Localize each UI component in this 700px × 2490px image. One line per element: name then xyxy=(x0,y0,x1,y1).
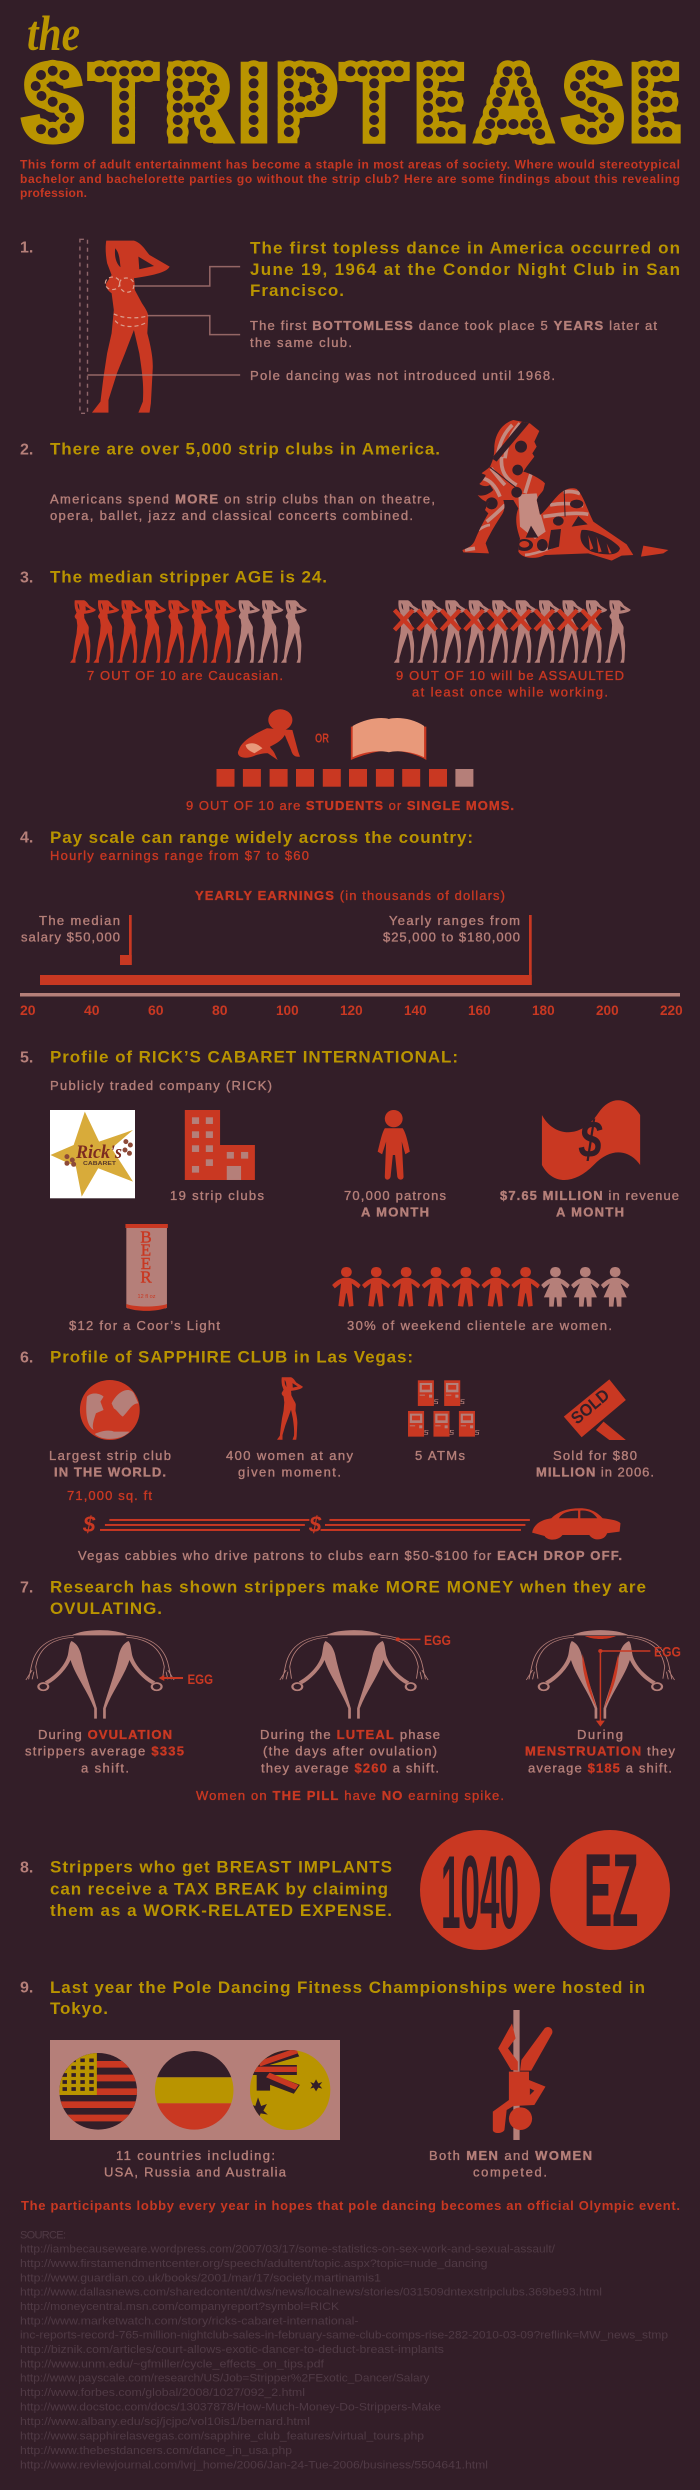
title marquee letters: A xyxy=(475,42,553,164)
body text: opera, ballet, jazz and classical concerts combined. xyxy=(50,508,413,523)
caption: menstruation xyxy=(525,1727,676,1776)
section 1: first dances xyxy=(20,238,680,413)
axis labels: 100 xyxy=(276,1002,299,1018)
range annotation and bar: $25,000 to $180,000 xyxy=(383,930,520,945)
heading: Profile of SAPPHIRE CLUB in Las Vegas: xyxy=(50,1348,413,1367)
label: egg: EGG xyxy=(654,1644,681,1660)
dollar signs xyxy=(82,1512,322,1537)
icon: atms xyxy=(408,1380,479,1437)
section 6: sapphire club xyxy=(20,1348,654,1563)
heading xyxy=(50,1978,645,2018)
range annotation and bar xyxy=(40,913,532,985)
axis labels xyxy=(20,1002,683,1018)
sources xyxy=(20,2229,668,2471)
caption: women: given moment. xyxy=(238,1465,341,1480)
heading xyxy=(50,1858,392,1920)
flag: Australia xyxy=(248,2048,333,2132)
flag: USA xyxy=(58,2052,138,2132)
sources: http://www.firstamendmentcenter.org/speech/adultent/topic.aspx?topic=nude_dancing xyxy=(20,2258,488,2270)
icon: dancer silhouette with pole xyxy=(80,239,240,413)
title marquee letters: S xyxy=(21,42,85,163)
median annotation: The median xyxy=(39,913,120,928)
title marquee letters: R xyxy=(165,42,232,164)
pictogram: 9 of 10 squares xyxy=(216,769,473,787)
median annotation xyxy=(21,913,132,965)
sources: http://www.forbes.com/global/2008/1027/092_2.html xyxy=(20,2387,305,2399)
caption: largest club xyxy=(49,1448,171,1503)
speed lines xyxy=(100,1519,530,1531)
number 9: 9. xyxy=(20,1980,33,1997)
heading: There are over 5,000 strip clubs in America. xyxy=(50,440,440,459)
section 2: strip clubs xyxy=(20,415,685,565)
icon: open book xyxy=(351,718,426,760)
caption: ovulation: During OVULATION xyxy=(38,1727,172,1742)
number 5: 5. xyxy=(20,1050,33,1066)
axis labels: 120 xyxy=(340,1002,363,1018)
heading: Pay scale can range widely across the country: xyxy=(50,828,473,847)
pictogram: 9 of 10 assaulted xyxy=(394,600,631,663)
sources: http://www.albany.edu/scj/jcjpc/vol10is1/bernard.html xyxy=(20,2416,310,2428)
number 6: 6. xyxy=(20,1350,33,1366)
diagram: luteal xyxy=(280,1630,428,1719)
caption: revenue xyxy=(500,1188,679,1220)
icon: beer can: B xyxy=(140,1228,152,1246)
axis xyxy=(20,993,680,996)
heading text: Francisco. xyxy=(250,281,344,300)
caption: countries xyxy=(104,2148,287,2180)
logo: rick's cabaret xyxy=(50,1110,135,1198)
caption: sold xyxy=(536,1448,654,1480)
icon: reclining figure with instruments xyxy=(462,420,668,560)
icon: crawling baby xyxy=(238,709,300,760)
panel: flags xyxy=(50,2040,340,2140)
title xyxy=(21,5,681,164)
section 7: ovulation xyxy=(20,1578,681,1803)
section 4: pay scale xyxy=(20,828,683,1018)
subheading: Hourly earnings range from $7 to $60 xyxy=(50,848,309,863)
sources: http://www.reviewjournal.com/lvrj_home/2006/Jan-24-Tue-2006/business/5504641.html xyxy=(20,2459,488,2471)
title marquee letters: S xyxy=(561,42,625,163)
flag: Russia xyxy=(154,2050,234,2132)
heading: Research has shown strippers make MORE MONEY when they are xyxy=(50,1578,646,1597)
caption: luteal xyxy=(260,1727,440,1776)
intro text xyxy=(20,158,680,200)
heading text xyxy=(250,238,680,300)
intro text: profession. xyxy=(20,186,87,200)
axis labels: 180 xyxy=(532,1002,555,1018)
title marquee letters: E xyxy=(629,42,681,164)
heading: OVULATING. xyxy=(50,1599,162,1618)
sources: http://www.docstoc.com/docs/13037878/How-Much-Money-Do-Strippers-Make xyxy=(20,2401,441,2413)
sources: http://www.marketwatch.com/story/ricks-cabaret-international- xyxy=(20,2315,359,2327)
caption: ovulation: strippers average $335 xyxy=(25,1744,184,1759)
sources: http://www.payscale.com/research/US/Job=Stripper%2FExotic_Dancer/Salary xyxy=(20,2373,430,2385)
diagram: ovulation xyxy=(26,1630,183,1719)
caption: sold: MILLION in 2006. xyxy=(536,1465,654,1480)
caption: largest club: 71,000 sq. ft xyxy=(67,1488,152,1503)
number 4: 4. xyxy=(20,830,33,847)
icon: beer can: R xyxy=(140,1268,152,1286)
heading: Last year the Pole Dancing Fitness Championships were hosted in xyxy=(50,1978,645,1997)
body text: Americans spend MORE on strip clubs than on theatre, xyxy=(50,491,435,506)
caption: revenue: $7.65 MILLION in revenue xyxy=(500,1188,679,1203)
caption: luteal: (the days after ovulation) xyxy=(263,1744,437,1759)
caption: countries: 11 countries including: xyxy=(116,2148,275,2163)
section 8: tax break xyxy=(20,1830,670,1951)
heading xyxy=(50,1578,646,1618)
caption: strip clubs: 19 strip clubs xyxy=(170,1188,264,1203)
section 3: median age xyxy=(20,568,631,813)
section 9: pole dancing championships xyxy=(20,1978,680,2213)
caption: atms: 5 ATMs xyxy=(415,1448,466,1463)
icon: 1040 badge xyxy=(420,1830,540,1951)
body text xyxy=(50,491,435,523)
sources: http://www.guardian.co.uk/books/2001/mar/17/society.martinamis1 xyxy=(20,2272,381,2284)
range annotation and bar: Yearly ranges from xyxy=(389,913,520,928)
axis labels: 200 xyxy=(596,1002,619,1018)
icon: beer can xyxy=(125,1224,168,1311)
title script word: the xyxy=(27,5,80,61)
caption: ovulation xyxy=(25,1727,184,1776)
logo: rick's cabaret: Rick's xyxy=(75,1142,122,1163)
caption: sold: Sold for $80 xyxy=(553,1448,637,1463)
icon: person xyxy=(378,1110,410,1180)
number 8: 8. xyxy=(20,1860,33,1877)
caption: patrons: 70,000 patrons xyxy=(344,1188,446,1203)
caption: men and women: competed. xyxy=(473,2165,547,2180)
dollar signs: $ xyxy=(82,1512,96,1537)
title marquee letters xyxy=(21,42,681,164)
sources: http://www.thebestdancers.com/dance_in_usa.php xyxy=(20,2445,292,2457)
caption: cabbies: Vegas cabbies who drive patrons to clubs earn $50-$100 for EACH DROP OFF. xyxy=(78,1548,622,1563)
heading: them as a WORK-RELATED EXPENSE. xyxy=(50,1901,392,1920)
intro text: This form of adult entertainment has become a staple in most areas of society. Where would stereotypical xyxy=(20,158,680,172)
title marquee letters: T xyxy=(90,42,157,164)
body text: The first BOTTOMLESS dance took place 5 YEARS later at xyxy=(250,318,657,333)
diagram: menstruation xyxy=(526,1630,675,1727)
caption: menstruation: average $185 a shift. xyxy=(528,1761,672,1776)
axis labels: 80 xyxy=(212,1002,228,1018)
caption: students or single moms: 9 OUT OF 10 are STUDENTS or SINGLE MOMS. xyxy=(186,798,514,813)
caption: patrons xyxy=(344,1188,446,1220)
sources: SOURCE: xyxy=(20,2229,66,2241)
icon: sold sign: SOLD xyxy=(567,1385,613,1428)
icon: wavy dollar bill xyxy=(542,1100,640,1180)
number 3: 3. xyxy=(20,569,33,586)
marquee bulb plates xyxy=(36,71,667,134)
heading: Profile of RICK’S CABARET INTERNATIONAL: xyxy=(50,1048,458,1067)
number 7: 7. xyxy=(20,1580,33,1596)
body text: the same club. xyxy=(250,335,352,350)
icon: dancer xyxy=(277,1377,303,1440)
sources: inc-reports-record-765-million-nightclub-sales-in-february-same-club-comps-rise-282-2010-03-09?reflink=MW_news_stmp xyxy=(20,2330,668,2342)
intro text: bachelor and bachelorette parties go without the strip club? Here are some findings about this revealing xyxy=(20,172,680,186)
logo: rick's cabaret: CABARET xyxy=(83,1161,117,1167)
icon: beer can: E xyxy=(141,1254,151,1273)
axis labels: 160 xyxy=(468,1002,491,1018)
number 2: 2. xyxy=(20,442,33,458)
icon: building xyxy=(185,1110,255,1180)
axis labels: 60 xyxy=(148,1002,164,1018)
cab fare graphic xyxy=(82,1508,620,1540)
callout: the pill: Women on THE PILL have NO earning spike. xyxy=(196,1788,504,1803)
caption: largest club: IN THE WORLD. xyxy=(54,1465,166,1480)
label: or: OR xyxy=(315,730,329,746)
caption: countries: USA, Russia and Australia xyxy=(104,2165,287,2180)
pictogram: 7 of 10 caucasian xyxy=(70,600,307,663)
caption: largest club: Largest strip club xyxy=(49,1448,171,1463)
section 5: rick's cabaret xyxy=(20,1048,679,1333)
caption: women: 400 women at any xyxy=(226,1448,354,1463)
heading: Tokyo. xyxy=(50,1999,108,2018)
icon: pole dancer inverted xyxy=(493,2010,552,2140)
caption: ovulation: a shift. xyxy=(81,1761,129,1776)
caption: beer price: $12 for a Coor’s Light xyxy=(69,1318,220,1333)
sources: http://www.unm.edu/~gfmiller/cycle_effects_on_tips.pdf xyxy=(20,2358,325,2370)
caption: clientele: 30% of weekend clientele are women. xyxy=(347,1318,612,1333)
caption: assaulted xyxy=(396,668,624,700)
axis labels: 40 xyxy=(84,1002,100,1018)
caption: assaulted: 9 OUT OF 10 will be ASSAULTED xyxy=(396,668,624,683)
icon: wavy dollar bill: $ xyxy=(578,1111,603,1169)
heading text: June 19, 1964 at the Condor Night Club in San xyxy=(250,260,680,279)
axis labels: 140 xyxy=(404,1002,427,1018)
label: egg: EGG xyxy=(424,1632,451,1648)
icon: globe xyxy=(80,1380,140,1440)
sources: http://iambecauseweare.wordpress.com/2007/03/17/some-statistics-on-sex-work-and-sexual-assault/ xyxy=(20,2244,556,2256)
heading: Strippers who get BREAST IMPLANTS xyxy=(50,1858,392,1877)
caption: menstruation: MENSTRUATION they xyxy=(525,1744,676,1759)
sources: http://moneycentral.msn.com/companyreport?symbol=RICK xyxy=(20,2301,340,2313)
number 1: 1. xyxy=(20,240,33,256)
marquee bulbs xyxy=(36,71,667,134)
median annotation: salary $50,000 xyxy=(21,930,120,945)
axis labels: 220 xyxy=(660,1002,683,1018)
caption: caucasian: 7 OUT OF 10 are Caucasian. xyxy=(87,668,283,683)
heading: can receive a TAX BREAK by claiming xyxy=(50,1880,388,1899)
caption: luteal: they average $260 a shift. xyxy=(261,1761,439,1776)
body text: Pole dancing was not introduced until 1968. xyxy=(250,368,555,383)
caption: patrons: A MONTH xyxy=(361,1205,429,1220)
caption: revenue: A MONTH xyxy=(556,1205,624,1220)
caption: luteal: During the LUTEAL phase xyxy=(260,1727,440,1742)
heading: The median stripper AGE is 24. xyxy=(50,568,327,586)
sources: http://biznik.com/articles/court-allows-exotic-dancer-to-deduct-breast-implants xyxy=(20,2344,445,2356)
section 8: tax break: 1040 xyxy=(441,1835,519,1951)
body text xyxy=(250,318,657,383)
title marquee letters: T xyxy=(341,42,407,164)
caption: assaulted: at least once while working. xyxy=(412,685,608,700)
icon: beer can: 12 fl oz xyxy=(138,1294,156,1300)
label: egg: EGG xyxy=(188,1671,213,1687)
caption: men and women: Both MEN and WOMEN xyxy=(429,2148,592,2163)
chart title: YEARLY EARNINGS (in thousands of dollars) xyxy=(195,888,505,903)
chart: yearly earnings xyxy=(20,888,683,1018)
title marquee letters: I xyxy=(236,43,272,164)
icon: sold sign xyxy=(564,1379,626,1440)
subheading: Publicly traded company (RICK) xyxy=(50,1078,272,1093)
sources: http://www.sapphirelasvegas.com/sapphire_club_features/virtual_tours.php xyxy=(20,2430,424,2442)
pictogram: clientele xyxy=(332,1267,629,1307)
callout: olympic lobby: The participants lobby every year in hopes that pole dancing becomes an official Olympic event. xyxy=(21,2198,680,2213)
heading text: The first topless dance in America occurred on xyxy=(250,238,680,258)
sources: http://www.dallasnews.com/sharedcontent/dws/news/localnews/stories/031509dntexstripclubs.369be93.html xyxy=(20,2287,602,2299)
title marquee letters: P xyxy=(274,42,338,163)
title marquee letters: E xyxy=(414,42,466,164)
axis labels: 20 xyxy=(20,1002,36,1018)
icon: beer can: E xyxy=(141,1240,151,1260)
caption: menstruation: During xyxy=(577,1727,623,1742)
icon: EZ badge: EZ xyxy=(584,1832,638,1948)
caption: women xyxy=(226,1448,354,1480)
icon: car xyxy=(532,1508,620,1540)
caption: men and women xyxy=(429,2148,592,2180)
dollar signs: $ xyxy=(308,1512,322,1537)
icon: EZ badge xyxy=(550,1830,670,1950)
